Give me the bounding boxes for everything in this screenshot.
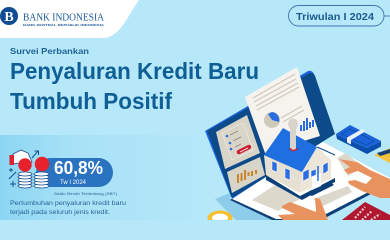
lower left gradient panel <box>0 135 210 220</box>
coin <box>208 210 232 226</box>
laptop screen <box>205 71 333 199</box>
screen panel: checklist <box>216 115 260 169</box>
stat: 60,8%: 60,8% <box>54 158 103 178</box>
keyboard <box>252 153 362 211</box>
logo: Bank Indonesia: BANK SENTRAL REPUBLIK INDONESIA <box>23 23 105 27</box>
credit card <box>374 148 390 163</box>
header logo panel <box>0 0 139 38</box>
description text <box>10 200 126 216</box>
description text: terjadi pada seluruh jenis kredit. <box>10 209 110 216</box>
badge: Triwulan I 2024: Triwulan I 2024 <box>296 12 375 23</box>
title: Tumbuh Positif <box>10 88 172 114</box>
logo: Bank Indonesia: BANK INDONESIA <box>23 12 104 24</box>
right hand <box>339 159 390 198</box>
laptop shadow <box>215 192 275 220</box>
icon: hand with coins <box>9 150 113 188</box>
value pill <box>36 158 113 187</box>
description text: Pertumbuhan penyaluran kredit baru <box>10 200 126 207</box>
logo: Bank Indonesia <box>0 7 105 27</box>
title: Penyaluran Kredit Baru <box>10 58 259 84</box>
stat caption: Saldo Bersih Tertimbang (SBT) <box>54 192 117 196</box>
left hand <box>278 198 328 220</box>
logo: Bank Indonesia: B <box>4 10 14 25</box>
screen panel: bar chart <box>227 157 265 193</box>
laptop base <box>230 143 390 220</box>
house <box>264 118 335 200</box>
paper report <box>245 67 320 153</box>
cash stack <box>336 125 381 154</box>
calculator <box>342 202 390 220</box>
badge: Triwulan I 2024 <box>288 6 390 26</box>
subtitle: Survei Perbankan <box>10 46 89 56</box>
illustration: laptop with house <box>205 67 390 226</box>
stat period: Tw I 2024 <box>60 180 87 186</box>
title <box>10 58 259 114</box>
